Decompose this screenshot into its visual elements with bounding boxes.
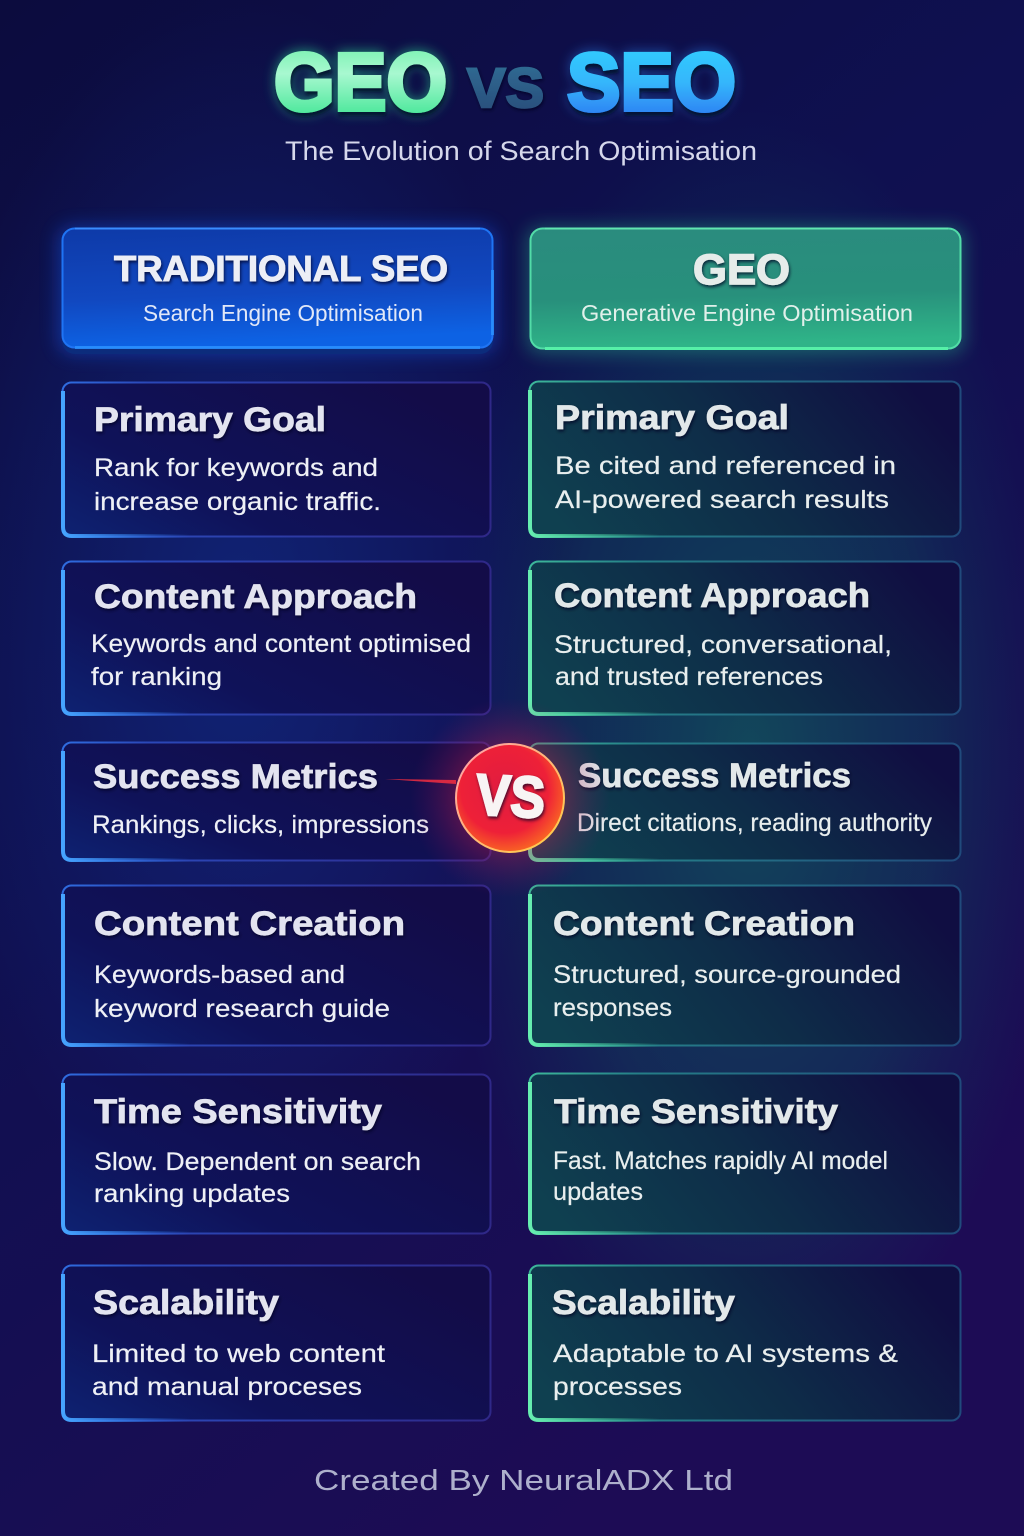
subheading: generative engine optimisation: Generative Engine Optimisation [581, 300, 913, 326]
panel: SEO content approach [62, 562, 490, 714]
title: SEO [567, 37, 736, 128]
heading: Content Approach [94, 578, 417, 616]
description: Fast. Matches rapidly AI model [553, 1147, 888, 1175]
description: ranking updates [94, 1180, 290, 1208]
heading: Primary Goal [555, 399, 789, 437]
panel: GEO content approach [530, 562, 960, 714]
description [553, 961, 901, 1022]
description [92, 1340, 385, 1401]
description: Slow. Dependent on search [94, 1148, 421, 1176]
description [91, 630, 471, 691]
panel: GEO success metrics [530, 744, 960, 860]
description [555, 452, 896, 514]
description: Rank for keywords and [94, 454, 378, 482]
panel: GEO content creation [530, 886, 960, 1046]
description: AI-powered search results [555, 486, 889, 514]
subtitle: The Evolution of Search Optimisation [285, 136, 757, 166]
panel: GEO time sensitivity [530, 1074, 960, 1234]
title: GEO [274, 37, 447, 128]
description: responses [553, 994, 672, 1022]
panel: SEO content creation [62, 886, 490, 1046]
description: Structured, conversational, [554, 631, 892, 659]
heading: Scalability [93, 1284, 279, 1322]
subheading: search engine optimisation: Search Engine Optimisation [143, 300, 423, 326]
panel: GEO scalability [530, 1266, 960, 1420]
panel: SEO scalability [62, 1266, 490, 1420]
VS badge [385, 698, 610, 898]
description: and trusted references [555, 663, 823, 691]
description [94, 1148, 421, 1208]
title [274, 35, 736, 129]
heading: Content Creation [94, 905, 405, 943]
panel: GEO header [526, 226, 965, 354]
panel: SEO primary goal [62, 382, 490, 536]
panel: traditional SEO header [58, 226, 496, 354]
description [553, 1147, 888, 1206]
panel: SEO success metrics [62, 742, 490, 860]
heading: Scalability [552, 1284, 735, 1322]
description: Keywords-based and [94, 961, 345, 989]
description: Direct citations, reading authority [577, 809, 932, 837]
description [554, 631, 892, 691]
description: updates [553, 1178, 643, 1206]
description: Structured, source-grounded [553, 961, 901, 989]
heading: traditional SEO: TRADITIONAL SEO [114, 248, 448, 289]
description: increase organic traffic. [94, 488, 381, 516]
title: VS [467, 56, 544, 119]
description: for ranking [91, 663, 222, 691]
footer credit: Created By NeuralADX Ltd [314, 1465, 733, 1497]
description [553, 1340, 898, 1401]
description: Adaptable to AI systems & [553, 1340, 898, 1368]
description: Keywords and content optimised [91, 630, 471, 658]
heading: Content Approach [554, 577, 870, 615]
description: Limited to web content [92, 1340, 385, 1368]
title: GEO [274, 35, 447, 129]
VS badge: VS [474, 762, 547, 831]
description: Rankings, clicks, impressions [92, 811, 429, 839]
description: and manual proceses [92, 1373, 362, 1401]
description [94, 454, 381, 516]
description [94, 961, 390, 1023]
heading: Success Metrics [93, 758, 378, 796]
heading: Content Creation [553, 905, 855, 943]
description: keyword research guide [94, 995, 390, 1023]
panel: SEO time sensitivity [62, 1074, 490, 1234]
heading: Time Sensitivity [554, 1093, 838, 1131]
heading: Primary Goal [94, 401, 326, 439]
description: Be cited and referenced in [555, 452, 896, 480]
description: processes [553, 1373, 682, 1401]
panel: GEO primary goal [530, 382, 960, 536]
title: SEO [567, 35, 736, 129]
heading: Success Metrics [578, 757, 851, 795]
heading: Time Sensitivity [94, 1093, 382, 1131]
heading: GEO: GEO [693, 246, 790, 294]
